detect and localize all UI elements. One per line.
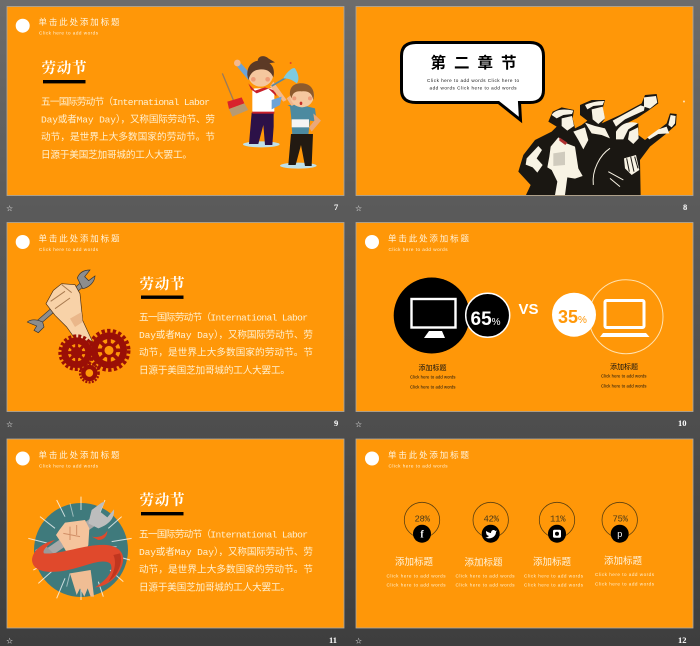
heading underline — [141, 512, 184, 515]
caption 4: Click here to add words — [595, 572, 655, 577]
header subtitle: Click here to add words — [388, 247, 448, 252]
page number: 7 — [334, 202, 339, 212]
illustration: fist with wrench and ribbon — [28, 497, 132, 600]
left caption — [410, 363, 456, 390]
body text — [139, 312, 313, 376]
illustration: workers — [518, 94, 685, 195]
header circle — [16, 452, 30, 466]
stat: 42% twitter — [473, 502, 508, 543]
body text: 动节，是世界上大多数国家的劳动节。节 — [139, 564, 313, 576]
body text: 动节，是世界上大多数国家的劳动节。节 — [41, 131, 215, 143]
header subtitle: Click here to add words — [39, 247, 99, 252]
page number: 8 — [683, 202, 687, 212]
panel: slide 8 — [355, 6, 693, 213]
caption 1: Click here to add words — [386, 582, 446, 588]
body text: Day或者May Day），又称国际劳动节、劳 — [139, 546, 313, 558]
icon: star: ☆ — [355, 420, 362, 429]
panel: slide 11 — [6, 439, 344, 646]
body text: 日源于美国芝加哥城的工人大罢工。 — [139, 582, 290, 594]
body text: Day或者May Day），又称国际劳动节、劳 — [41, 114, 215, 126]
header title: 单击此处添加标题 — [38, 234, 120, 244]
left caption: Click here to add words — [410, 374, 456, 380]
caption 1: Click here to add words — [386, 574, 446, 578]
heading underline — [43, 80, 86, 83]
bubble text: Click here to add words Click here to — [427, 78, 519, 83]
caption 4: Click here to add words — [595, 582, 655, 586]
35% badge: 35% — [558, 307, 587, 327]
stat: 75% pinterest: p — [617, 529, 622, 539]
body text: 日源于美国芝加哥城的工人大罢工。 — [139, 364, 290, 376]
illustration: hand with wrench and gears — [27, 270, 129, 382]
caption 2: Click here to add words — [456, 582, 515, 588]
body text — [139, 528, 313, 594]
caption 1: 添加标题 — [395, 556, 434, 568]
right caption: Click here to add words — [601, 384, 646, 388]
header circle — [16, 235, 30, 249]
speech bubble — [402, 42, 544, 120]
illustration: children cleaning — [222, 56, 321, 169]
header title: 单击此处添加标题 — [388, 450, 469, 460]
body text: 五一国际劳动节（International Labor — [139, 312, 308, 324]
outline circle with laptop — [589, 280, 663, 354]
stat: 75% pinterest — [602, 502, 637, 543]
heading underline — [141, 296, 184, 299]
stat: 42% twitter: 42% — [484, 514, 500, 524]
body text: 五一国际劳动节（International Labor — [139, 528, 308, 540]
header subtitle: Click here to add words — [39, 464, 99, 468]
caption 3 — [524, 556, 584, 588]
caption 4 — [595, 555, 655, 586]
icon: star: ☆ — [6, 636, 13, 646]
header circle — [365, 235, 379, 249]
page number: 12 — [678, 635, 686, 645]
stat: 28% facebook — [404, 502, 440, 543]
body text: 日源于美国芝加哥城的工人大罢工。 — [41, 149, 192, 161]
heading: 劳动节 — [140, 275, 185, 294]
panel: slide 7 — [6, 6, 344, 213]
caption 4: 添加标题 — [604, 555, 643, 567]
page number: 9 — [334, 418, 338, 428]
stat: 28% facebook: 28% — [414, 514, 431, 524]
35% badge — [552, 293, 596, 337]
icon: star: ☆ — [355, 636, 362, 646]
page number: 11 — [329, 635, 337, 645]
black circle with monitor — [394, 278, 470, 354]
caption 2 — [456, 556, 515, 588]
left caption: 添加标题 — [418, 363, 446, 372]
65% badge — [466, 293, 510, 337]
65% badge: 65% — [470, 309, 501, 330]
icon: star: ☆ — [6, 420, 13, 429]
header subtitle: Click here to add words — [388, 464, 448, 468]
header title: 单击此处添加标题 — [388, 234, 469, 244]
caption 2: 添加标题 — [464, 556, 503, 568]
header subtitle: Click here to add words — [39, 31, 99, 36]
stat: 28% facebook: f — [420, 530, 424, 540]
body text: 五一国际劳动节（International Labor — [41, 96, 210, 108]
caption 1 — [386, 556, 446, 588]
heading: 劳动节 — [140, 491, 185, 510]
right caption — [601, 362, 646, 388]
body text: 动节，是世界上大多数国家的劳动节。节 — [139, 346, 313, 358]
right caption: Click here to add words — [601, 374, 646, 378]
caption 3: 添加标题 — [533, 556, 572, 568]
bubble text: add words Click here to add words — [430, 86, 517, 90]
body text: Day或者May Day），又称国际劳动节、劳 — [139, 329, 313, 341]
stat: 75% pinterest: 75% — [612, 514, 629, 524]
header circle — [16, 19, 30, 33]
caption 3: Click here to add words — [524, 582, 584, 588]
page number: 10 — [678, 418, 686, 428]
right caption: 添加标题 — [610, 362, 638, 371]
left caption: Click here to add words — [410, 384, 456, 390]
panel: slide 9 — [6, 222, 344, 429]
stat: 11% instagram — [539, 502, 575, 543]
caption 3: Click here to add words — [524, 574, 584, 578]
icon: star: ☆ — [355, 204, 362, 213]
panel: slide 12 — [355, 439, 693, 646]
icon: star: ☆ — [6, 204, 13, 213]
bubble text — [427, 78, 519, 90]
header circle — [365, 452, 379, 466]
panel: slide 10 — [355, 222, 693, 429]
body text — [41, 96, 215, 161]
header title: 单击此处添加标题 — [38, 450, 120, 460]
caption 2: Click here to add words — [456, 574, 515, 578]
bubble heading: 第二章节 — [430, 53, 516, 72]
VS label: VS — [518, 301, 538, 318]
header title: 单击此处添加标题 — [38, 17, 120, 27]
heading: 劳动节 — [42, 59, 87, 78]
stat: 11% instagram: 11% — [550, 514, 566, 524]
